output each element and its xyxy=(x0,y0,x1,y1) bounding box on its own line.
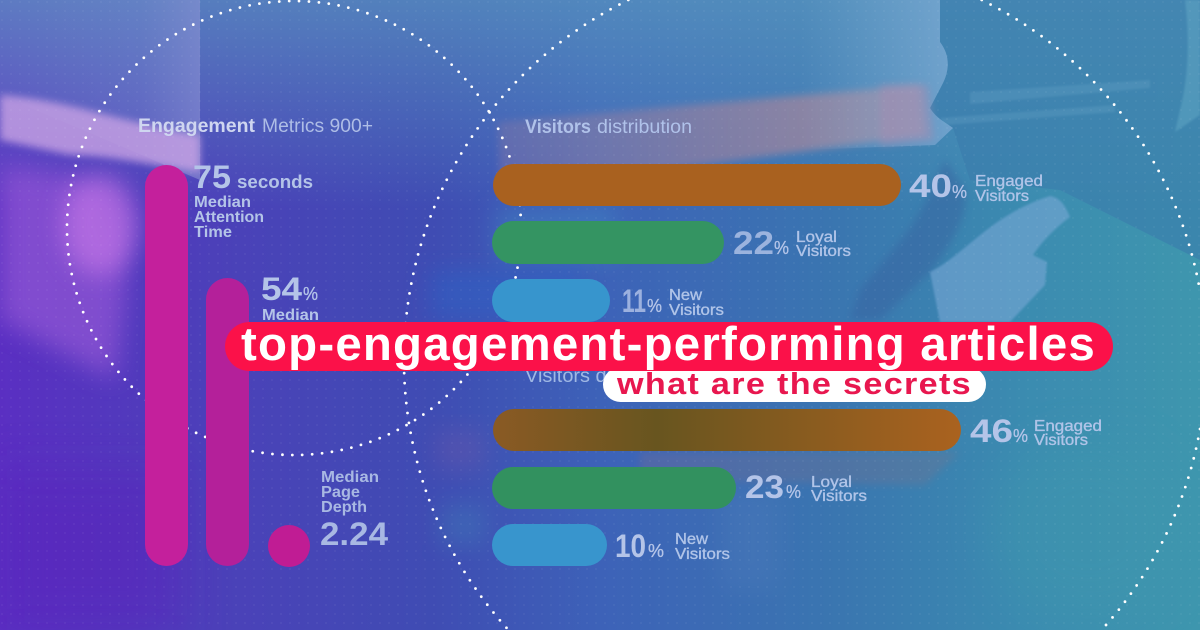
label: 23 percent loyal visitors: 23 xyxy=(745,469,784,505)
metric: 75 seconds median attention time xyxy=(193,159,313,241)
heading: visitors distribution: distribution xyxy=(597,117,692,138)
metric: 75 seconds median attention time: 75 xyxy=(193,159,231,195)
metric: 75 seconds median attention time: Attention xyxy=(194,209,264,226)
label: 22 percent loyal visitors: Visitors xyxy=(796,243,851,260)
pill: subtitle: what are the secrets xyxy=(616,366,972,401)
bar: engaged visitors 46 xyxy=(493,409,961,451)
label: 11 percent new visitors: New xyxy=(669,287,703,304)
heading: engagement metrics: Metrics 900+ xyxy=(262,116,373,137)
label: 40 percent engaged visitors: % xyxy=(952,182,967,202)
label: 10 percent new visitors: New xyxy=(675,531,709,548)
label: 46 percent engaged visitors: % xyxy=(1013,426,1028,446)
metric: 75 seconds median attention time: seconds xyxy=(237,172,313,192)
metric: 54 percent median: 54 xyxy=(261,271,302,307)
metric: median page depth 2.24: Page xyxy=(321,484,360,501)
metric: 54 percent median: % xyxy=(303,284,318,304)
bar: median attention time xyxy=(145,165,188,566)
label: 23 percent loyal visitors: Loyal xyxy=(811,474,852,491)
metric: median page depth 2.24: 2.24 xyxy=(320,516,388,552)
label: 22 percent loyal visitors xyxy=(733,225,851,261)
bar: loyal visitors 22 xyxy=(492,221,724,264)
label: 10 percent new visitors: Visitors xyxy=(675,546,730,563)
metric: 75 seconds median attention time: Median xyxy=(194,194,251,211)
bar: loyal visitors 23 xyxy=(492,467,736,509)
panel: engagement metrics xyxy=(138,116,388,567)
label: 22 percent loyal visitors: Loyal xyxy=(796,229,837,246)
bar: engaged visitors 40 xyxy=(493,164,901,206)
label: 22 percent loyal visitors: % xyxy=(774,238,789,258)
label: 23 percent loyal visitors: % xyxy=(786,482,801,502)
label: 10 percent new visitors xyxy=(615,528,730,564)
label: 22 percent loyal visitors: 22 xyxy=(733,225,774,261)
label: 11 percent new visitors xyxy=(622,283,724,319)
label: 40 percent engaged visitors: 40 xyxy=(909,168,952,204)
photo: person in profile xyxy=(800,0,1200,322)
label: 46 percent engaged visitors: 46 xyxy=(970,413,1013,449)
heading: visitors distribution: Visitors xyxy=(525,117,591,138)
label: 11 percent new visitors: % xyxy=(647,296,662,316)
heading: visitors distribution, partly hidden: Visitors distribution xyxy=(525,366,692,387)
label: 11 percent new visitors: 11 xyxy=(622,283,646,319)
dotted circle: right xyxy=(404,0,1200,630)
panel: visitors distribution top xyxy=(492,117,1043,322)
dotted circle: left xyxy=(67,1,521,455)
label: 10 percent new visitors: % xyxy=(648,541,664,561)
bar: new visitors 11 xyxy=(492,279,610,322)
metric: 54 percent median xyxy=(261,271,319,324)
dot: median page depth xyxy=(268,525,310,567)
metric: median page depth 2.24: Median xyxy=(321,469,379,486)
pill: title: top-engagement-performing articles xyxy=(241,317,1096,370)
label: 46 percent engaged visitors xyxy=(970,413,1102,449)
label: 23 percent loyal visitors xyxy=(745,469,867,505)
panel: visitors distribution bottom xyxy=(492,366,1102,566)
label: 10 percent new visitors: 10 xyxy=(615,528,646,564)
metric: 54 percent median: Median xyxy=(262,307,319,324)
label: 46 percent engaged visitors: Visitors xyxy=(1034,432,1088,449)
bar: median scroll xyxy=(206,278,249,566)
label: 23 percent loyal visitors: Visitors xyxy=(811,488,867,505)
bar: new visitors 10 xyxy=(492,524,607,566)
title banner xyxy=(225,317,1113,402)
label: 11 percent new visitors: Visitors xyxy=(669,302,724,319)
heading: engagement metrics: Engagement xyxy=(138,116,256,137)
metric: 75 seconds median attention time: Time xyxy=(194,224,232,241)
label: 40 percent engaged visitors: Visitors xyxy=(975,188,1029,205)
metric: median page depth 2.24 xyxy=(320,469,388,552)
metric: median page depth 2.24: Depth xyxy=(321,499,367,516)
label: 46 percent engaged visitors: Engaged xyxy=(1034,418,1102,435)
label: 40 percent engaged visitors: Engaged xyxy=(975,173,1043,190)
label: 40 percent engaged visitors xyxy=(909,168,1043,205)
